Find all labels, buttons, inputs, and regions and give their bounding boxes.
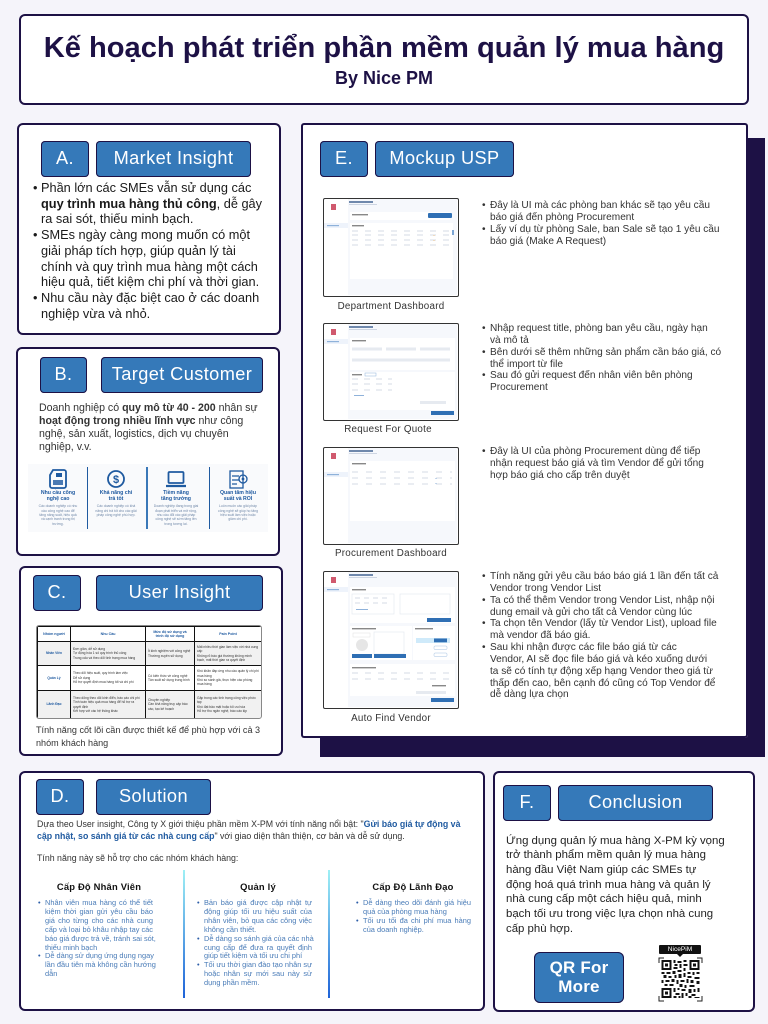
description: procurement dashboard: nhận request báo giá và tìm Vendor để gửi tổng [490,458,704,469]
heading E: Mockup USP [389,148,500,168]
heading F [558,785,713,821]
description: auto find vendor: dễ dàng lựa chọn [490,689,569,700]
column heading manager: Quản lý [240,881,276,892]
user insight table: Nhu Cầu [101,632,115,636]
column: leader [356,881,471,934]
description: request for quote: Procurement [490,382,548,393]
need: growth: công nghệ sẽ sớm tăng lên [155,517,197,521]
user insight table: Hỗ trợ quyết định mua hàng tốt và chi phí [73,680,134,684]
employee bullets: báo giá được trả về, tránh sai sót, [45,934,156,943]
user insight table: Dễ sử dụng [73,676,90,680]
badge B: B. [54,364,72,384]
description: request for quote: Nhập request title, phòng ban yêu cầu, ngày hạn [490,323,708,334]
leader bullets: Dễ dàng theo dõi đánh giá hiệu [363,898,471,907]
need: technology: và cạnh tranh trong thị [41,517,75,521]
user insight caption [36,724,260,748]
badge C [33,575,81,611]
need: technology: nghệ cao [47,496,69,502]
caption: procurement dashboard: Procurement Dashboard [335,548,447,559]
employee bullets: lần đầu tiên mà không cần hướng [45,960,156,969]
employee bullets: giá cho từng cho các nhà cung [45,916,153,925]
conclusion text: Ứng dụng quản lý mua hàng X-PM kỳ vọng [506,834,725,846]
user insight table: Đơn giản, dễ sử dụng [73,647,105,651]
need: budget: $ [113,474,119,486]
conclusion text: hàng đầu Việt Nam giúp các SMEs tự [506,864,696,876]
user insight table: Mất nhiều thời gian làm việc với nhà cung cấp [197,645,258,653]
badge F: F. [520,792,534,812]
employee bullets: kiệm thời gian gửi yêu cầu báo [45,907,153,916]
customer needs row [28,464,268,532]
market insight bullets [34,180,262,321]
badge C: C. [48,582,66,602]
need: budget: trả tốt [109,496,123,502]
user insight table: Chuyên nghiệp [148,698,170,702]
user insight table: Có kiến thức về công nghệ [148,674,187,678]
solution intro: cập nhật, so sánh giá từ các nhà cung cấp" với giao diện thân thiện, cơ bản và dễ sử dụng. [37,831,405,841]
user insight table: Hỗ trợ thu ngân nghệ, báo cáo kịp [197,709,247,713]
manager bullets: Tối ưu thời gian đào tạo nhân sự [204,960,312,969]
manager bullets: nhân viên, bỏ qua các công việc [204,916,312,925]
QR pattern [658,954,702,1002]
need: growth: nhu cầu đổi các giải pháp [157,513,195,517]
manager bullets: cung cấp để đưa ra quyết định [204,943,312,952]
manager bullets: giúp tiết kiệm và tối ưu chi phí [204,951,302,960]
badge E: E. [335,148,353,168]
column heading leader: Cấp Độ Lãnh Đạo [372,881,454,892]
need: growth: Tiềm năng [163,490,189,496]
description: auto find vendor: Ta có thể thêm Vendor trong Vendor List, nhập nội [490,595,714,606]
target customer description: Doanh nghiệp có quy mô từ 40 - 200 nhân sự [39,402,258,414]
panel A: market insight [17,123,281,335]
divider 2 [146,467,148,529]
manager bullets: không cần thiết. [204,925,256,934]
need: budget: Các doanh nghiệp có khả [97,504,135,508]
need: budget: pháp công nghệ phù hợp. [97,513,135,517]
description: department dashboard: Lấy ví dụ từ phòng Sale, ban Sale sẽ tạo 1 yêu cầu [490,224,720,235]
conclusion text: cấp phù hợp. [506,923,573,935]
conclusion text [506,834,725,935]
solution intro: Dựa theo User insight, Công ty X giới thiệu phần mềm X-PM với tính năng nổi bật: "Gửi báo giá tự động và [37,819,460,829]
need: technology: tăng năng suất, hiệu quả [39,513,77,517]
manager bullets: Bản báo giá được cập nhật tự [204,898,312,907]
user insight table: Tự động hóa 1 số quy trình thủ công [73,651,126,655]
conclusion text: nhà cung cấp một cách hiệu quả, minh [506,893,702,905]
need: ROI: hiệu suất làm việc hoặc [220,513,256,517]
description: department dashboard: báo giá (Make A Request) [490,236,606,247]
shadow block behind panel E [320,138,765,757]
user insight table: Gặp trong các tình trạng công việc phức tạp [197,696,256,704]
mockup: department dashboard [323,198,459,297]
mockup: auto find vendor [323,571,459,709]
QR tag [659,945,701,954]
market insight bullets: chính và quy trình mua hàng một cách [41,259,258,274]
market insight bullets: ra sai sót, thiếu minh bạch. [41,211,193,226]
panel B: target customer [16,347,280,556]
panel D: solution [19,771,485,1011]
user insight table: Khó khăn đáp ứng nhu cầu quản lý chi phí mua hàng [197,669,259,678]
badge A: A. [56,148,74,168]
badge D [36,779,84,815]
user insight table: Khó so sánh giá, thực hiện các phòng mua hàng [197,678,252,686]
mockup: procurement dashboard [323,447,459,545]
market insight bullets: quy trình mua hàng thủ công, dễ gây [41,196,262,211]
description: procurement dashboard: hợp báo giá cho cấp trên duyệt [490,470,630,481]
divider column 1 [183,870,185,998]
solution intro [37,819,461,841]
description: auto find vendor: ta sẽ có tính tự động xếp hạng Vendor theo giá từ [490,666,713,677]
heading C: User Insight [129,582,230,602]
QR call to action button [534,952,624,1003]
employee bullets: cấp và loại bỏ khâu nhập tay các [45,925,153,934]
user insight table: Không rõ báo giá thường không minh bạch, mất thời gian ra quyết định [197,654,252,662]
target customer description: nghiệp, v.v. [39,441,92,453]
user insight table: Nhân Viên [46,651,62,655]
QR code [658,945,702,1002]
user insight table: Lãnh Đạo [46,702,62,706]
description: procurement dashboard [482,446,704,481]
description: auto find vendor: dung email và gửi cho tất cả Vendor cùng lúc [490,607,692,618]
leader bullets: Tối ưu tối đa chi phí mua hàng [363,916,471,925]
column: employee [38,881,156,978]
need: budget [95,470,137,517]
need: growth: tăng trưởng [161,496,191,502]
manager bullets: động giúp tối ưu hiệu suất của [204,907,312,916]
user insight table: Cần khả năng truy cập báo cáo, tạo kế hoạch [148,702,188,711]
description: department dashboard: Đây là UI mà các phòng ban khác sẽ tạo yêu cầu [490,200,710,211]
user insight caption: Tính năng cốt lõi cần được thiết kế để phù hợp với cả 3 [36,724,260,734]
manager bullets: hoặc nhân sự mới sau này sử [204,969,312,978]
panel F: conclusion [493,771,755,1012]
caption: department dashboard: Department Dashboard [338,301,444,312]
need: technology: cầu công nghệ cao để [41,508,75,512]
heading A [96,141,251,177]
solution lead-in: Tính năng này sẽ hỗ trợ cho các nhóm khách hàng: [37,853,238,863]
market insight bullets: Phần lớn các SMEs vẫn sử dụng các [41,180,251,195]
heading B: Target Customer [112,364,252,384]
panel C: user insight [19,566,283,756]
description: department dashboard [482,200,720,247]
manager bullets: dụng phần mềm. [204,978,259,987]
description: request for quote: và mô tả [490,335,529,346]
need: budget: năng chi trả tốt cho các giải [95,508,137,512]
need: growth [154,471,198,526]
description: auto find vendor: thấp đến cao, bên cạnh đó cũng có Top Vendor để [490,678,715,689]
manager bullets: Dễ dàng so sánh giá của các nhà [204,934,314,943]
caption: auto find vendor: Auto Find Vendor [351,713,431,724]
description: auto find vendor [482,571,718,700]
panel E: mockup USP [301,123,748,738]
need: technology: Nhu cầu công [41,490,75,496]
need: budget: Khả năng chi [100,490,132,496]
market insight bullets: SMEs ngày càng mong muốn có một [41,227,250,242]
user insight table: Kết hợp với các hệ thống khác [73,709,118,713]
need: ROI [218,470,258,521]
manager bullets [197,898,314,987]
heading D [96,779,211,815]
user insight table: Pain Point [219,632,237,636]
employee bullets: Nhân viên mua hàng có thể tiết [45,898,153,907]
QR call to action button: More [558,977,600,996]
heading C [96,575,263,611]
description: auto find vendor: Ta chọn tên Vendor (lấy từ Vendor List), upload file [490,618,717,629]
need: ROI: Luôn muốn các giải pháp [219,504,257,508]
user insight table: Ít kinh nghiệm với công nghệ [148,649,190,653]
need: technology [38,469,78,526]
title panel [19,14,749,105]
badge A [41,141,89,177]
description: procurement dashboard: Đây là UI của phòng Procurement dùng để tiếp [490,446,700,457]
QR tag: NicePiM [668,946,692,953]
description: request for quote [482,323,721,393]
divider 3 [209,467,210,529]
need: technology: Các doanh nghiệp có nhu [39,504,77,508]
divider 1 [87,467,88,529]
need: ROI: Quan tâm hiệu [220,490,256,496]
leader bullets [356,898,471,934]
description: department dashboard: báo giá đến phòng Procurement [490,212,634,223]
leader bullets: của doanh nghiệp. [363,925,424,934]
mockup: request for quote [323,323,459,421]
column heading employee: Cấp Độ Nhân Viên [57,881,141,892]
need: growth: Doanh nghiệp đang trong giai [154,504,198,508]
description: auto find vendor: Vendor, AI sẽ đọc file báo giá và kéo xuống dưới [490,654,707,665]
title: Kế hoạch phát triển phần mềm quản lý mua hàng [44,32,724,64]
description: auto find vendor: mà vendor đã báo giá. [490,630,590,641]
column: manager [197,881,314,987]
need: ROI: công nghệ sẽ giúp họ tăng [218,508,258,512]
heading E [375,141,514,177]
employee bullets: Dễ dàng sử dụng ứng dụng ngay [45,951,154,960]
target customer description: hoạt động trong nhiều lĩnh vực như công [39,415,243,427]
market insight bullets: nghiệp vừa và nhỏ. [41,306,150,321]
description: request for quote: Bên dưới sẽ thêm những sản phẩm cần báo giá, có [490,347,721,358]
market insight bullets: giải pháp tích hợp, giúp quản lý tài [41,243,236,258]
user insight caption: nhóm khách hàng [36,738,108,748]
employee bullets [38,898,156,978]
user insight table: Theo dõng theo dõi kinh điển, báo cáo chi phí [73,696,140,700]
QR call to action button: QR For [550,958,608,977]
conclusion text: trở thành phẩm mềm quản lý mua hàng [506,849,706,861]
heading B [101,357,263,393]
subtitle: By Nice PM [335,68,433,88]
user insight table [36,625,262,719]
description: request for quote: thể import từ file [490,359,563,370]
badge B [40,357,87,393]
market insight bullets: hiệu quả, tiết kiệm chi phí và thời gian. [41,274,259,289]
target customer description [39,402,258,453]
description: request for quote: Sau đó gửi request đến nhân viên bên phòng [490,370,693,381]
description: auto find vendor: Tính năng gửi yêu cầu báo báo giá 1 lần đến tất cả [490,571,718,582]
badge D: D. [50,786,70,806]
user insight table: Khó đạt bảo mật hoặc tối ưu hóa [197,704,245,708]
user insight table: Tính toán hiệu quả mua hàng để hỗ trợ ra quyết định [73,700,134,708]
heading D: Solution [119,786,188,806]
badge E [320,141,368,177]
user insight table: Trung cấu và theo dõi tình trạng mua hàng [73,656,135,660]
heading F: Conclusion [588,792,682,812]
conclusion text: bạch tối ưu trong việc lựa chọn nhà cung [506,908,713,920]
divider column 2 [328,870,330,998]
user insight table: trình độ sử dụng [156,634,184,638]
leader bullets: quả của phòng mua hàng [363,907,447,916]
need: growth: đoạn phát triển và mở rộng, [155,508,197,512]
conclusion text: động hoá quá trình mua hàng và quản lý [506,879,711,891]
description: auto find vendor: Vendor trong Vendor List [490,583,601,594]
need: ROI: suất và ROI [224,496,252,502]
caption: request for quote: Request For Quote [344,424,432,435]
need: growth: trong tương lai. [164,522,188,526]
user insight table: Nhóm người [43,632,65,636]
need: technology: trường. [52,522,64,526]
description: auto find vendor: Sau khi nhận được các file báo giá từ các [490,642,677,653]
user insight table: Thường xuyên sử dụng [148,654,183,658]
user insight table: Quản Lý [47,676,61,680]
heading A: Market Insight [114,148,233,168]
user insight table: Tần suất sử dụng trung bình [148,678,190,682]
market insight bullets: Nhu cầu này đặc biệt cao ở các doanh [41,290,259,305]
employee bullets: thiếu minh bạch [45,943,97,952]
need: ROI: giảm chi phí. [228,517,248,521]
target customer description: nghệ, sản xuất, logistics, dịch vụ chuyên [39,428,229,440]
user insight table: Theo dõi hiệu suất, quy trình làm việc [73,671,128,675]
badge F [503,785,551,821]
user insight table: Mức độ sử dụng và [153,630,187,634]
employee bullets: dẫn [45,969,57,978]
